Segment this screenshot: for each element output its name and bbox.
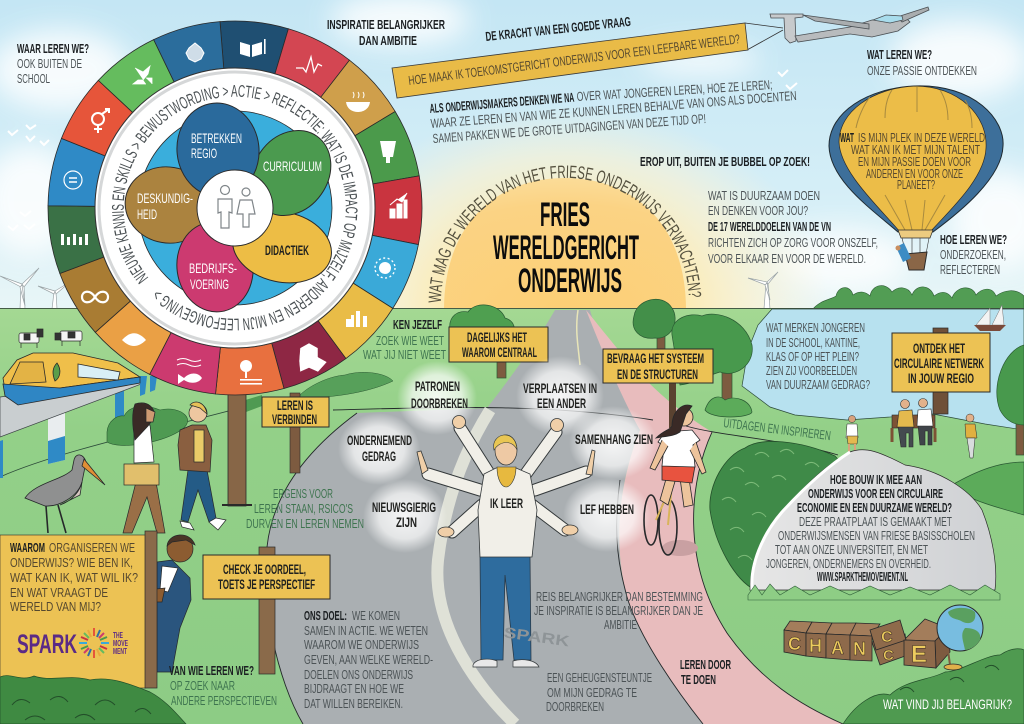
board post — [145, 531, 157, 688]
sun glow — [300, 105, 830, 515]
shrub behind people — [107, 406, 188, 445]
grass at rock base — [748, 584, 1000, 600]
petal labels: DESKUNDIG- — [137, 190, 193, 206]
person: woman walking — [123, 403, 165, 533]
yellow info board — [0, 535, 146, 688]
person: man peeking — [147, 535, 195, 672]
ken jezelf: KEN JEZELF — [393, 317, 442, 332]
icon: book — [240, 39, 266, 57]
yellow info board: EN WAT VRAAGT DE — [10, 585, 108, 600]
hoe leren we — [940, 232, 1007, 277]
petal labels: BETREKKEN — [191, 130, 242, 146]
rock with text: TOT AAN ONZE UNIVERSITEIT, EN MET — [775, 542, 928, 557]
spark logo: THE — [113, 631, 123, 640]
icon: tree — [240, 360, 262, 385]
block letters: A — [831, 638, 844, 658]
sailboat — [974, 305, 1006, 331]
petal labels: CURRICULUM — [263, 158, 322, 174]
intro paragraph: OVER WAT JONGEREN LEREN, HOE ZE LEREN; — [576, 77, 773, 104]
ons doel: DOELEN ONS ONDERWIJS — [304, 667, 413, 682]
bubble: verplaatsen in een ander: EEN ANDER — [537, 395, 586, 411]
waar leren we — [17, 41, 89, 86]
block faces — [784, 619, 950, 668]
van wie leren we: OP ZOEK NAAR — [170, 678, 235, 693]
petal labels: DIDACTIEK — [265, 242, 309, 258]
torso — [478, 468, 537, 557]
petal: curriculum — [235, 115, 347, 231]
intro paragraph: WAAR ZE LEREN EN VAN WIE ZE KUNNEN LEREN BEHALVE VAN ONS ALS DOCENTEN — [430, 88, 797, 131]
plane — [745, 7, 929, 50]
bubble: samenhang zien — [569, 406, 657, 480]
van wie leren we — [169, 663, 277, 708]
bubble: ondernemend gedrag: GEDRAG — [362, 448, 396, 464]
block letters: C — [881, 629, 893, 646]
petal labels: BEDRIJFS- — [189, 260, 237, 276]
bush bottom right — [843, 649, 1024, 724]
reis belangrijker — [534, 589, 703, 632]
block letters: E — [911, 641, 927, 668]
yellow info board: WAT KAN IK, WAT WIL IK? — [10, 570, 138, 585]
sign: bevraag het systeem: BEVRAAG HET SYSTEEM — [607, 350, 704, 366]
bush bottom left — [0, 676, 186, 724]
de kracht van een goede vraag: DE KRACHT VAN EEN GOEDE VRAAG — [485, 14, 632, 44]
jeans — [480, 556, 531, 660]
ring inner shade — [99, 72, 371, 344]
cows — [19, 329, 82, 348]
blue inner circle — [138, 111, 332, 305]
sign: bevraag het systeem — [603, 349, 713, 428]
wind turbines — [0, 268, 778, 309]
icon: growth chart — [390, 193, 407, 218]
rock with text: HOE BOUW IK MEE AAN — [830, 472, 922, 487]
bird: godwit — [25, 455, 105, 533]
wat leren we: WAT LEREN WE? — [867, 47, 932, 62]
geheugensteuntje: DOORBREKEN — [546, 699, 604, 714]
wheel post — [222, 392, 252, 506]
bubble: ondernemend gedrag: ONDERNEMEND — [347, 432, 412, 448]
change blocks — [784, 619, 950, 668]
icon: heartbeat — [296, 57, 322, 72]
intro paragraph: SAMEN PAKKEN WE DE GROTE UITDAGINGEN VAN DEZE TIJD OP! — [432, 111, 706, 146]
reis belangrijker: REIS BELANGRIJKER DAN BESTEMMING — [536, 589, 703, 604]
inspiratie belangrijker dan ambitie — [327, 17, 445, 48]
globe — [937, 605, 983, 670]
head — [495, 435, 517, 465]
ground — [0, 308, 1024, 724]
petal: didactiek — [226, 202, 338, 292]
ons doel: SAMEN IN ACTIE. WE WETEN — [304, 623, 428, 638]
block letters: N — [853, 639, 866, 659]
white ring — [95, 68, 375, 348]
SDG wheel — [48, 20, 422, 396]
sky background — [0, 0, 1024, 310]
person: man walking — [178, 402, 226, 530]
icon: infinity — [82, 292, 108, 302]
collar — [497, 467, 516, 487]
bubble: nieuwsgierig zijn: NIEUWSGIERIG — [372, 499, 436, 515]
sign: leren is verbinden: VERBINDEN — [272, 411, 317, 427]
bubble: verplaatsen in een ander: VERPLAATSEN IN — [523, 380, 597, 396]
hill line and dark hedge — [0, 372, 393, 477]
sign: leren is verbinden — [262, 393, 329, 473]
arms — [428, 428, 586, 532]
reis belangrijker: JE INSPIRATIE IS BELANGRIJKER DAN JE — [534, 603, 703, 618]
sign: ontdek het circulaire netwerk — [892, 328, 990, 414]
waar leren we: SCHOOL — [17, 71, 50, 86]
intro paragraph: ALS ONDERWIJSMAKERS DENKEN WE NA — [429, 90, 575, 116]
lake — [742, 309, 1024, 430]
duurzaam text: RICHTEN ZICH OP ZORG VOOR ONSZELF, — [708, 235, 878, 250]
ons doel: WE KOMEN — [352, 608, 400, 623]
far treeline — [812, 286, 1024, 310]
scene: WERELDGERICHT — [493, 229, 639, 267]
petal labels — [137, 130, 322, 292]
ken jezelf — [363, 317, 446, 362]
hair — [494, 435, 517, 450]
ons doel: WAAROM WE ONDERWIJS — [304, 637, 419, 652]
horizon line — [0, 308, 1024, 310]
icon: fish — [177, 358, 202, 384]
ken jezelf: ZOEK WIE WEET — [376, 333, 444, 348]
spark logo: MOVE — [113, 639, 128, 648]
ons doel: GEVEN, AAN WELKE WERELD- — [304, 652, 433, 667]
intro paragraph — [429, 77, 797, 146]
skill bubbles — [338, 356, 657, 553]
block letters: C — [788, 634, 801, 654]
balloon: PLANEET? — [897, 177, 935, 192]
bubble: patronen doorbreken: PATRONEN — [415, 378, 460, 394]
icon: flower — [186, 43, 204, 62]
van wie leren we: VAN WIE LEREN WE? — [169, 663, 254, 678]
dark bush behind rock — [710, 441, 840, 590]
ons doel: ONS DOEL: — [304, 608, 347, 623]
bubble: samenhang zien: SAMENHANG ZIEN — [575, 431, 653, 447]
duurzaam text: EN DENKEN VOOR JOU? — [708, 203, 808, 218]
ergens voor text: DURVEN EN LEREN NEMEN — [246, 516, 364, 531]
sign: bevraag het systeem: EN DE STRUCTUREN — [617, 366, 698, 382]
sign: ontdek het circulaire netwerk: ONTDEK HET — [913, 340, 965, 356]
icon: cubes — [299, 343, 327, 372]
lake text: IN DE SCHOOL, KANTINE, — [766, 335, 860, 350]
duurzaam text — [708, 188, 878, 266]
wat leren we — [867, 47, 977, 78]
bubble: patronen doorbreken: DOORBREKEN — [411, 395, 468, 411]
spark logo: SPARK — [17, 629, 77, 659]
sign: leren is verbinden: LEREN IS — [277, 397, 313, 413]
shoes — [473, 659, 539, 667]
ring text: NIEUWE KENNIS EN SKILLS > BEWUSTWORDING > ACTIE > REFLECTIE: WAT IS DE IMPACT OP MIJZELF, ANDEREN EN MIJN LEEFOMGEVING > — [112, 85, 358, 330]
waar leren we: OOK BUITEN DE — [17, 56, 82, 71]
icon: equality — [64, 171, 82, 189]
yellow info board: WERELD VAN MIJ? — [10, 599, 101, 614]
duurzaam text: WAT IS DUURZAAM DOEN — [708, 188, 820, 203]
ons doel: BIJDRAAGT EN HOE WE — [304, 681, 404, 696]
leren door te doen: LEREN DOOR — [680, 657, 731, 672]
lake text — [766, 320, 870, 392]
duurzaam text: DE 17 WERELDDOELEN VAN DE VN — [708, 219, 831, 234]
inspiratie belangrijker dan ambitie: DAN AMBITIE — [359, 33, 417, 48]
pink cycle path — [586, 310, 843, 724]
waar leren we: WAAR LEREN WE? — [17, 41, 89, 56]
block letters: H — [809, 636, 822, 656]
icon: city — [346, 311, 367, 327]
lake text: WAT MERKEN JONGEREN — [766, 320, 865, 335]
ergens voor text: ERGENS VOOR — [273, 486, 333, 501]
icon: eye — [122, 333, 146, 346]
bubble: lef hebben — [563, 478, 651, 552]
logo burst — [79, 628, 109, 658]
people standing — [846, 414, 977, 458]
uitdagen en inspireren: UITDAGEN EN INSPIREREN — [723, 415, 832, 443]
wheel segments — [36, 10, 431, 406]
erop uit: EROP UIT, BUITEN JE BUBBEL OP ZOEK! — [640, 154, 810, 169]
shirt label: IK LEER — [490, 495, 523, 511]
road edge lines — [265, 407, 843, 724]
icon: people — [61, 234, 88, 245]
cyclist — [644, 405, 706, 556]
geheugensteuntje: OM MIJN GEDRAG TE — [547, 685, 637, 700]
lake text: KLAS OF OP HET PLEIN? — [766, 349, 859, 364]
petal labels: REGIO — [191, 145, 217, 161]
gray road — [265, 310, 703, 724]
block letters: C — [883, 647, 894, 664]
icon: dove — [133, 66, 152, 84]
leren door te doen — [680, 657, 731, 687]
sign: dagelijks het waarom centraal: WAAROM CENTRAAL — [462, 344, 537, 360]
icon: sun — [375, 258, 395, 278]
icon: two people — [218, 186, 255, 228]
spark logo: MENT — [113, 647, 127, 656]
lake text: ZIEN ZIJ VOORBEELDEN — [766, 363, 857, 378]
road stamp: SPARK — [503, 624, 570, 650]
petal: deskundigheid — [119, 160, 217, 250]
sign: dagelijks het waarom centraal: DAGELIJKS HET — [467, 329, 527, 345]
main title — [493, 196, 639, 300]
bubble: verplaatsen in een ander — [516, 356, 604, 436]
birds — [8, 70, 797, 230]
sign: check je oordeel: TOETS JE PERSPECTIEF — [218, 576, 315, 592]
sky texts — [17, 14, 632, 86]
arc title: WAT MAG DE WERELD VAN HET FRIESE ONDERWIJS VERWACHTEN? — [428, 166, 702, 302]
ergens voor text: LEREN STAAN, RSICO'S — [254, 501, 353, 516]
bubble: lef hebben: LEF HEBBEN — [580, 501, 634, 517]
ergens voor text — [246, 486, 364, 531]
white road line — [437, 410, 515, 724]
icon: bowl — [346, 92, 370, 112]
sign: dagelijks het waarom centraal — [449, 327, 548, 362]
petal: bedrijfsvoering — [171, 217, 259, 317]
yellow info board: ONDERWIJS? WIE BEN IK, — [10, 555, 133, 570]
sign: check je oordeel — [203, 547, 330, 674]
block letters — [788, 629, 927, 668]
banner — [392, 23, 748, 98]
banner: HOE MAAK IK TOEKOMSTGERICHT ONDERWIJS VOOR EEN LEEFBARE WERELD? — [407, 31, 741, 88]
petal labels: HEID — [137, 206, 157, 222]
sign: ontdek het circulaire netwerk: IN JOUW REGIO — [908, 370, 974, 386]
ons doel: DAT WILLEN BEREIKEN. — [304, 696, 403, 711]
train — [3, 353, 140, 405]
lake text: VAN DUURZAAM GEDRAG? — [766, 377, 870, 392]
petal: betrekken regio — [172, 99, 264, 201]
leren door te doen: TE DOEN — [681, 672, 716, 687]
yellow info board: ORGANISEREN WE — [49, 540, 135, 555]
people on bench — [892, 398, 935, 447]
icon: water drop — [380, 141, 396, 163]
main title: ONDERWIJS — [518, 262, 622, 300]
icon: gender — [92, 109, 109, 133]
central figure: ik leer — [417, 416, 595, 667]
inspiratie belangrijker dan ambitie: INSPIRATIE BELANGRIJKER — [327, 17, 445, 32]
bubble: patronen doorbreken — [397, 361, 477, 435]
balloon: WAT — [840, 130, 854, 145]
clouds — [0, 0, 1024, 290]
van wie leren we: ANDERE PERSPECTIEVEN — [171, 693, 277, 708]
duurzaam text: VOOR ELKAAR EN VOOR DE WERELD. — [708, 251, 866, 266]
sun dome — [444, 178, 686, 310]
rock with text — [750, 450, 996, 590]
sign: check je oordeel: CHECK JE OORDEEL, — [223, 561, 306, 577]
train viaduct — [0, 376, 157, 478]
bubble: ondernemend gedrag — [338, 413, 420, 485]
hands — [417, 416, 595, 537]
geheugensteuntje — [546, 670, 652, 714]
center circle — [197, 170, 273, 246]
trees — [450, 299, 1024, 515]
yellow info board: WAAROM — [10, 540, 45, 555]
balloon — [829, 86, 1003, 270]
bubble: nieuwsgierig zijn: ZIJN — [396, 514, 417, 530]
rock with text: WWW.SPARKTHEMOVEMENT.NL — [817, 569, 908, 584]
main title: FRIES — [540, 196, 590, 234]
bubble: nieuwsgierig zijn — [363, 479, 447, 553]
petal labels: VOERING — [190, 276, 229, 292]
ken jezelf: WAT JIJ NIET WEET — [363, 347, 446, 362]
reis belangrijker: AMBITIE — [604, 617, 637, 632]
geheugensteuntje: EEN GEHEUGENSTEUNTJE — [547, 670, 652, 685]
ons doel — [304, 608, 433, 711]
